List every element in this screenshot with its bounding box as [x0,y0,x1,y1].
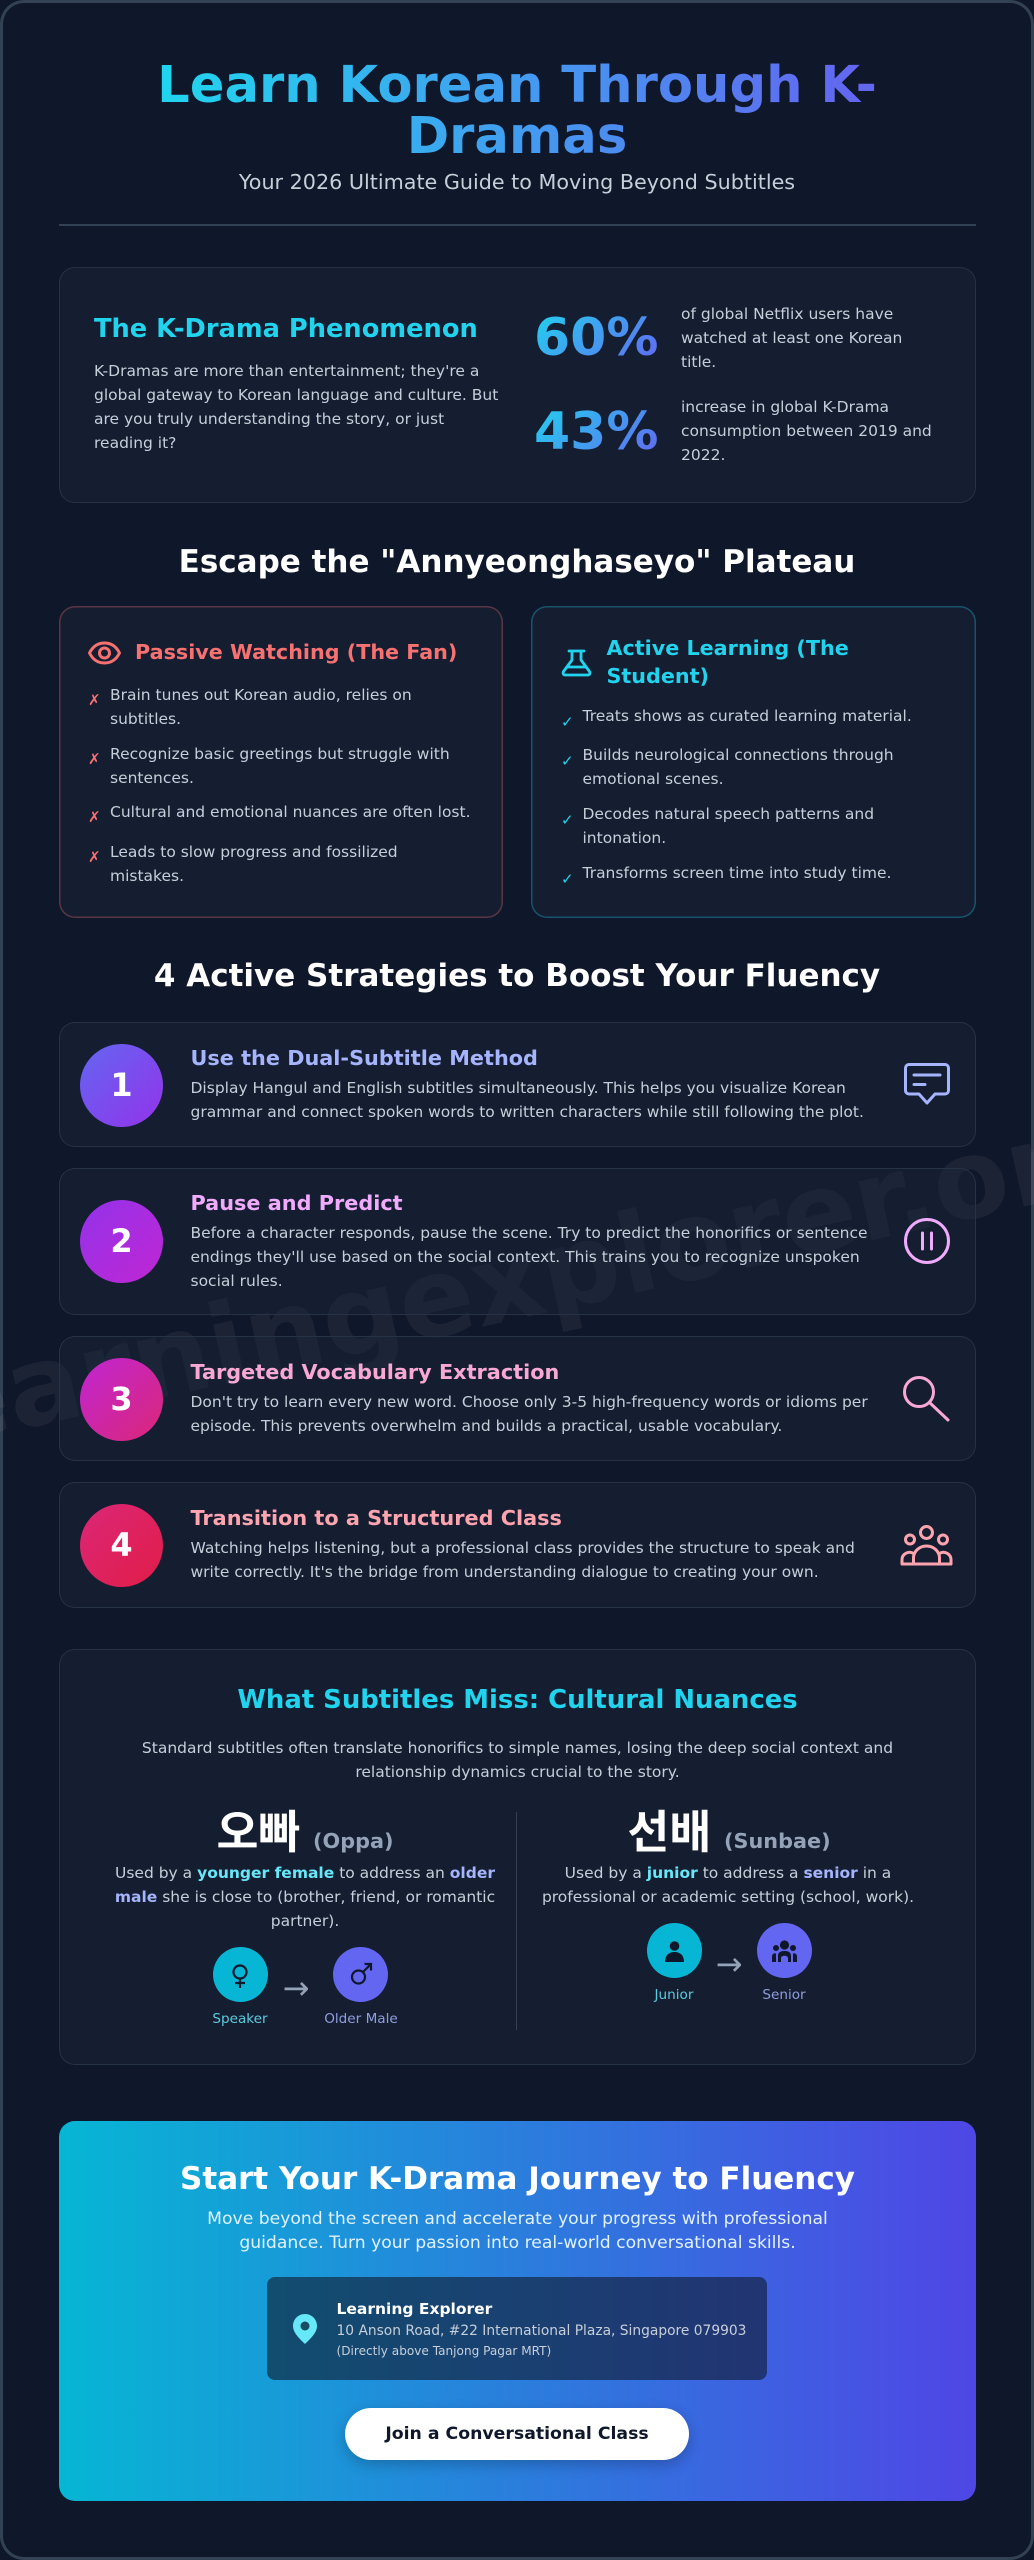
term: Oppa: 오빠 (Oppa) [216,1807,394,1858]
strategy text: grammar and connect spoken words to written characters while still following the plot. [190,1103,864,1121]
icon: older male [333,1947,388,2002]
address box [267,2277,767,2380]
nuances intro: Standard subtitles often translate honorifics to simple names, losing the deep social context and [142,1739,893,1757]
list item [582,805,874,847]
list item: Transforms screen time into study time. [582,864,891,882]
subtitle: Your 2026 Ultimate Guide to Moving Beyond Subtitles [239,170,795,194]
strategy text: social rules. [190,1272,283,1290]
panel: strategy 3 [59,1336,976,1461]
strategy text [190,1079,864,1121]
icon: subtitle chat [904,1063,950,1105]
phenomenon text: reading it? [94,434,176,452]
icon: pause [904,1218,950,1264]
nuances heading: What Subtitles Miss: Cultural Nuances [237,1685,798,1715]
icon: location pin [293,2314,317,2344]
strategy text: Watching helps listening, but a professional class provides the structure to speak and [190,1539,855,1557]
stat text: 60% [681,305,902,371]
icon: junior [646,1923,702,1978]
term: Sunbae: 선배 (Sunbae) [627,1807,831,1858]
icon: eye [88,642,121,664]
strategy text: Don't try to learn every new word. Choose only 3-5 high-frequency words or idioms per [190,1393,868,1411]
active heading [606,636,849,688]
heading: strategies: 4 Active Strategies to Boost Your Fluency [154,958,880,994]
strategy title: Pause and Predict [190,1191,403,1215]
panel: cultural nuances [59,1649,976,2065]
header divider [59,224,976,226]
list item: mistakes. [110,867,184,885]
list item: sentences. [110,769,194,787]
list item: emotional scenes. [582,770,724,788]
list item: intonation. [582,829,666,847]
strategy text: write correctly. It's the bridge from understanding dialogue to creating your own. [190,1563,819,1581]
stat text: 43% [681,398,932,464]
panel: strategy 1 [59,1022,976,1147]
strategy title: Transition to a Structured Class [190,1506,562,1530]
address: 10 Anson Road, #22 International Plaza, Singapore 079903 [336,2323,746,2339]
strategy text: endings they'll use based on the social context. This trains you to recognize unspoken [190,1248,860,1266]
list item: Treats shows as curated learning material. [582,707,912,725]
step number 2: 2 [110,1222,133,1260]
list item [110,686,412,728]
CTA text: Move beyond the screen and accelerate your progress with professional [207,2209,828,2229]
panel: strategy 4 [59,1482,976,1608]
list item: Cultural and emotional nuances are often lost. [110,803,471,821]
list item: Leads to slow progress and fossilized [110,843,398,861]
Oppa explanation: male she is close to (brother, friend, or romantic [115,1888,495,1906]
list item [110,843,398,885]
icon: senior [756,1923,812,1978]
stat: 60%: 60% [534,308,658,368]
step number 3: 3 [110,1380,133,1418]
strategy text: episode. This prevents overwhelm and builds a practical, usable vocabulary. [190,1417,782,1435]
icon: group [900,1525,952,1566]
list item [582,746,894,788]
label: older male: Older Male [324,2011,398,2027]
strategy text [190,1393,868,1435]
list marker: ✗ [88,848,101,866]
phenomenon text [94,362,498,452]
list marker: ✗ [88,691,101,709]
list marker: ✓ [561,713,574,731]
CTA heading: Start Your K-Drama Journey to Fluency [180,2161,855,2197]
stat text: 43%: consumption between 2019 and [681,422,932,440]
stat text: 43%: 2022. [681,446,725,464]
strategy text: Before a character responds, pause the scene. Try to predict the honorifics or sentence [190,1224,868,1242]
phenomenon heading: The K-Drama Phenomenon [94,314,478,344]
stat text: 60%: title. [681,353,716,371]
directions note: (Directly above Tanjong Pagar MRT) [336,2344,551,2358]
strategy title: Use the Dual-Subtitle Method [190,1046,538,1070]
Sunbae explanation: professional or academic setting (school, work). [542,1888,914,1906]
list item [110,745,450,787]
list item: Brain tunes out Korean audio, relies on [110,686,412,704]
strategy text: Display Hangul and English subtitles simultaneously. This helps you visualize Korean [190,1079,846,1097]
panel: strategy 2 [59,1168,976,1315]
nuances intro: relationship dynamics crucial to the story. [355,1763,680,1781]
panel: call to action [59,2121,976,2501]
passive heading: Passive Watching (The Fan) [135,640,457,664]
active heading: Active Learning (The [606,636,849,660]
stat text: 60%: of global Netflix users have [681,305,893,323]
panel: active learning [531,606,976,918]
step number 2 [80,1200,163,1283]
list marker: ✗ [88,808,101,826]
nuances intro [142,1739,893,1781]
Sunbae explanation: Used by a junior to address a senior in a [565,1864,891,1882]
step number 4 [80,1504,163,1586]
step number 1 [80,1044,163,1126]
step number 3 [80,1358,163,1440]
Oppa explanation [115,1864,495,1930]
Oppa explanation: Used by a younger female to address an older [115,1864,495,1882]
stat: 43%: 43% [534,402,658,462]
title [0,60,1034,162]
icon: flask [562,650,592,676]
panel: passive watching [59,606,503,918]
label: junior: Junior [655,1987,693,2003]
panel: K-Drama phenomenon [59,267,976,503]
arrow: → [283,1969,309,2007]
strategy text [190,1539,855,1581]
CTA text [207,2209,828,2253]
stat text: 43%: increase in global K-Drama [681,398,889,416]
step number 1: 1 [110,1066,133,1104]
step number 4: 4 [110,1526,133,1564]
CTA text: guidance. Turn your passion into real-world conversational skills. [239,2233,796,2253]
heading: plateau: Escape the "Annyeonghaseyo" Plateau [179,544,855,580]
label: senior: Senior [762,1987,806,2003]
list item: Recognize basic greetings but struggle with [110,745,450,763]
phenomenon text: are you truly understanding the story, or just [94,410,444,428]
stat text: 60%: watched at least one Korean [681,329,902,347]
icon: speaker [213,1947,268,2002]
list marker: ✓ [561,811,574,829]
list item: Decodes natural speech patterns and [582,805,874,823]
button: join class: Join a Conversational Class [385,2424,649,2444]
list marker: ✓ [561,752,574,770]
icon: search [903,1376,950,1422]
label: speaker: Speaker [212,2011,268,2027]
column divider [516,1812,517,2030]
active heading: Student) [606,664,709,688]
phenomenon text: K-Dramas are more than entertainment; they're a [94,362,479,380]
list item: subtitles. [110,710,181,728]
title: Learn Korean Through K- [157,55,877,115]
list marker: ✗ [88,750,101,768]
title: Dramas [407,106,627,166]
Sunbae explanation [542,1864,914,1906]
strategy title: Targeted Vocabulary Extraction [190,1360,559,1384]
Oppa explanation: partner). [271,1912,339,1930]
list marker: ✓ [561,870,574,888]
phenomenon text: global gateway to Korean language and culture. But [94,386,498,404]
school name: Learning Explorer [336,2300,492,2318]
arrow: → [716,1945,742,1983]
button: join class [345,2408,689,2460]
strategy text [190,1224,868,1290]
list item: Builds neurological connections through [582,746,894,764]
